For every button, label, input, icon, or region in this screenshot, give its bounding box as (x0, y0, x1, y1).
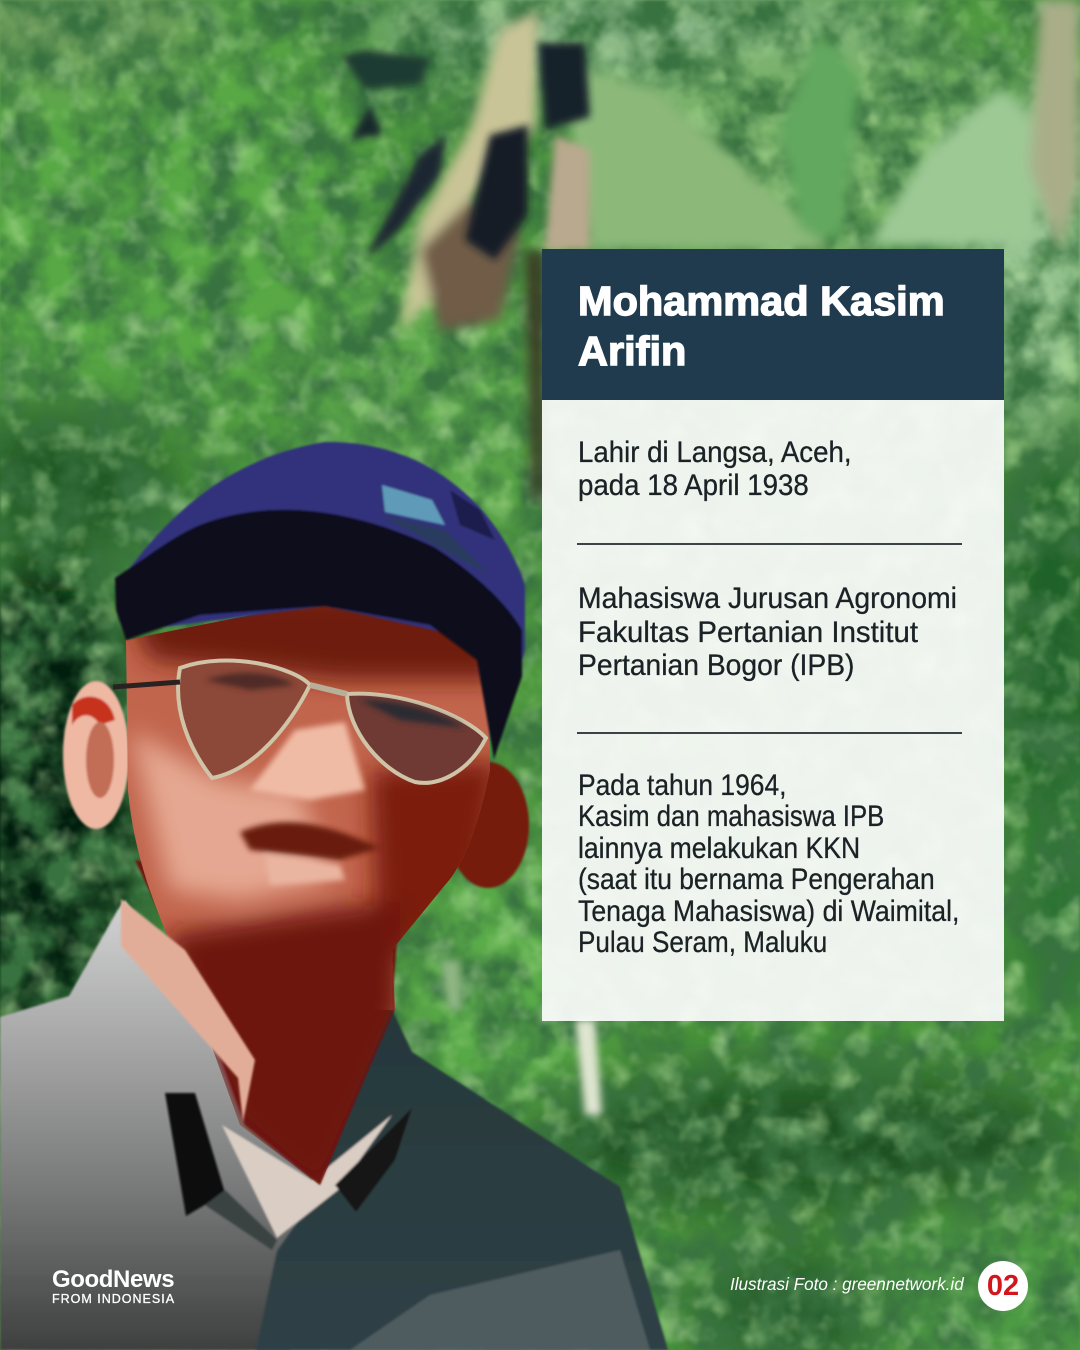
text block: KKN (578, 769, 959, 959)
panel: biography card (542, 249, 1004, 1021)
panel: card body (542, 400, 1004, 1021)
text block: study: Pertanian Bogor (IPB) (578, 649, 854, 682)
text block: birth: Lahir di Langsa, Aceh, (578, 436, 852, 469)
text block: KKN: Tenaga Mahasiswa) di Waimital, (578, 895, 959, 928)
page number badge: 02 (987, 1270, 1019, 1302)
collar skin strip (121, 899, 255, 1122)
text block: KKN: (saat itu bernama Pengerahan (578, 863, 935, 896)
page number badge (978, 1261, 1028, 1311)
text block: KKN: lainnya melakukan KKN (578, 832, 860, 865)
heading: name: Mohammad Kasim (578, 278, 945, 324)
palm tree (340, 0, 1080, 1115)
text block: KKN: Pada tahun 1964, (578, 769, 786, 802)
text block: birth (578, 436, 852, 502)
shirt: dark side (165, 1000, 668, 1350)
photo credit: Ilustrasi Foto : greennetwork.id (730, 1275, 964, 1294)
ears (63, 681, 529, 888)
neck (135, 860, 400, 1185)
text block: KKN: Pulau Seram, Maluku (578, 926, 827, 959)
portrait (0, 442, 668, 1350)
heading: name (542, 249, 1004, 400)
glasses (113, 661, 486, 783)
shirt: light side (0, 900, 320, 1350)
text block: study: Fakultas Pertanian Institut (578, 616, 918, 648)
text block: study (578, 582, 957, 682)
text block: study: Mahasiswa Jurusan Agronomi (578, 582, 957, 615)
cap (115, 442, 525, 760)
heading: name: Arifin (578, 328, 686, 374)
text block: birth: pada 18 April 1938 (578, 469, 809, 502)
text block: KKN: Kasim dan mahasiswa IPB (578, 800, 884, 833)
logo: GoodNews from Indonesia (52, 1266, 175, 1306)
face (126, 604, 490, 1185)
logo: GoodNews from Indonesia: FROM INDONESIA (52, 1292, 175, 1306)
logo: GoodNews from Indonesia: GoodNews (52, 1266, 174, 1293)
